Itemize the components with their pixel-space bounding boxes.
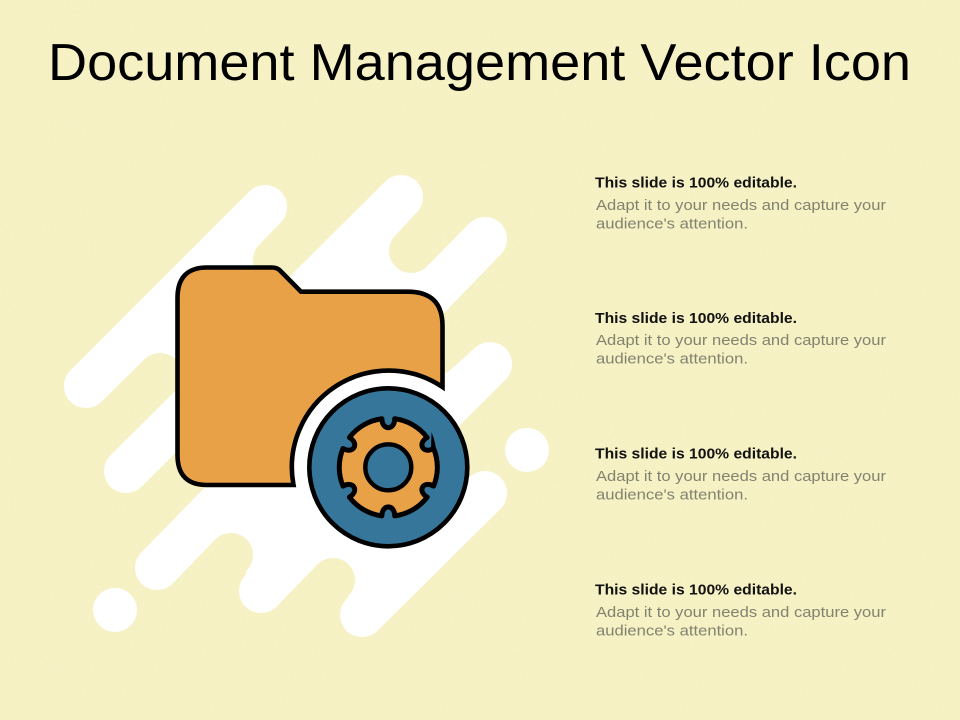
icon: folder <box>178 268 442 485</box>
text block 3: This slide is 100% editable. <box>595 447 797 463</box>
icon: gear badge <box>309 388 467 546</box>
text block 3: audience's attention. <box>596 486 748 503</box>
badge circle <box>309 388 467 546</box>
gear body <box>339 419 437 516</box>
gear outline spike <box>431 432 436 458</box>
text block 1: This slide is 100% editable. <box>595 176 797 192</box>
text block 3: Adapt it to your needs and capture your <box>596 468 886 485</box>
text block 3 <box>595 447 886 503</box>
text block 2 <box>595 311 886 367</box>
text block 2: audience's attention. <box>596 350 748 367</box>
white diagonal backdrop shape <box>64 175 549 637</box>
text block 4: audience's attention. <box>596 622 748 639</box>
text block 1: audience's attention. <box>596 215 748 232</box>
text block 2: This slide is 100% editable. <box>595 311 797 327</box>
text block 4 <box>595 583 886 639</box>
text block 1: Adapt it to your needs and capture your <box>596 197 886 214</box>
text block 4: This slide is 100% editable. <box>595 583 797 599</box>
text block 4: Adapt it to your needs and capture your <box>596 604 886 621</box>
gear hub <box>365 444 411 490</box>
text block 1 <box>595 176 886 232</box>
title: Document Management Vector Icon <box>48 34 911 92</box>
text block 2: Adapt it to your needs and capture your <box>596 332 886 349</box>
